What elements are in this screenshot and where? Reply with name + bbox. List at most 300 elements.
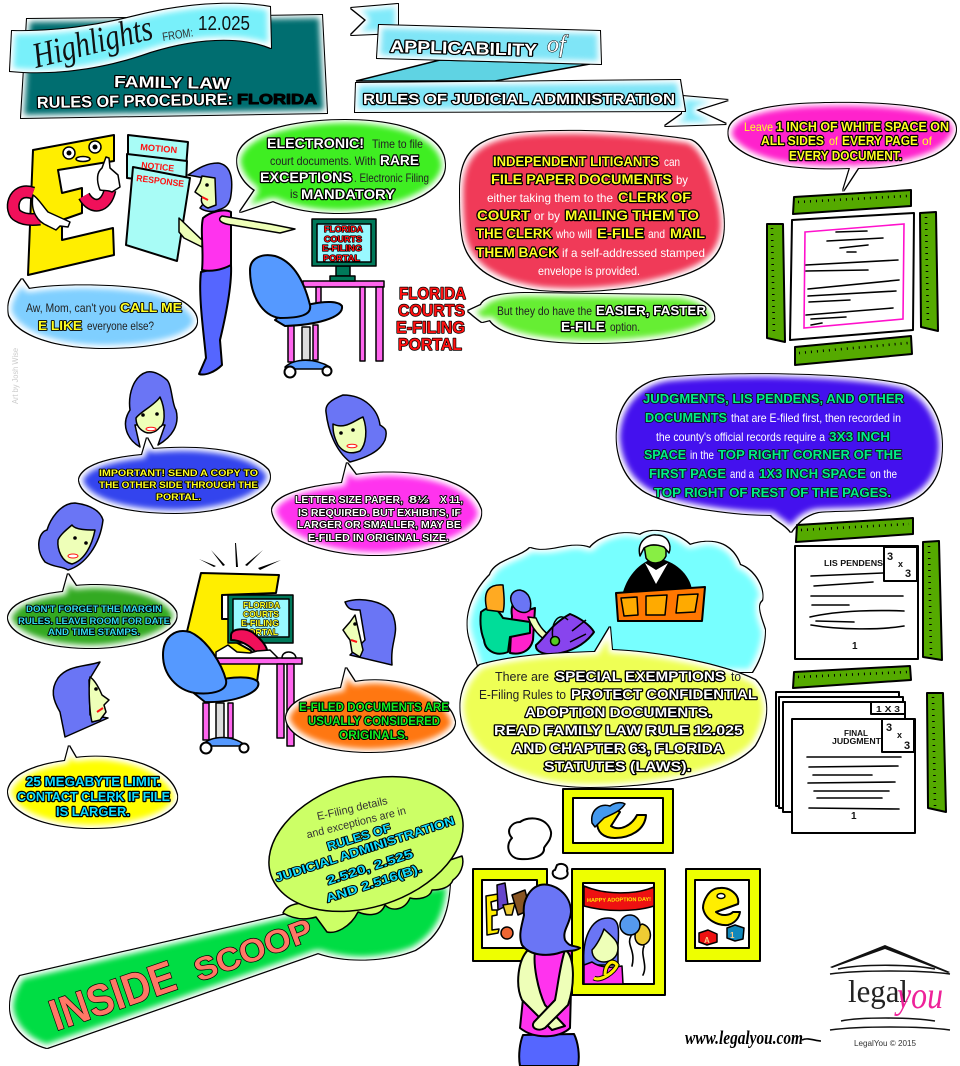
block 1: 1 (730, 931, 735, 940)
label: florida courts e-filing portal: COURTS (398, 302, 465, 320)
bubble text: LETTER SIZE PAPER, (295, 495, 403, 506)
monitor (312, 219, 376, 266)
right arm (84, 190, 110, 205)
bubble text: FILE PAPER DOCUMENTS (491, 172, 672, 187)
bubble text: CALL ME (120, 300, 182, 315)
back pages (776, 692, 905, 812)
bottom ruler (795, 336, 912, 365)
top (520, 948, 572, 1036)
screen (233, 599, 289, 637)
bubble text: everyone else? (87, 319, 154, 333)
bubble text (295, 495, 463, 544)
bubble text: either taking them to the (487, 191, 613, 205)
bubble text: or by (534, 209, 560, 223)
bubble text: THE OTHER SIDE THROUGH THE (99, 480, 258, 491)
art credit: Art by Josh Wise (11, 347, 20, 404)
bubble text: 25 MEGABYTE LIMIT. (26, 775, 161, 789)
first player (497, 883, 508, 910)
left ruler (767, 224, 785, 342)
lower curves (830, 1018, 950, 1030)
bubble text (17, 775, 170, 819)
face (333, 417, 366, 453)
bubble text: CONTACT CLERK IF FILE (17, 790, 170, 804)
speech bubble: electronic (237, 120, 445, 213)
hair (345, 600, 396, 665)
label: florida courts e-filing portal (396, 285, 466, 354)
bubble shape (468, 293, 714, 343)
3x3 label: x (898, 559, 903, 569)
scoop word: SCOOP (189, 911, 318, 989)
speech bubble: call me E (8, 279, 197, 348)
adoptive mother and child (480, 585, 552, 654)
bubble text: who will (555, 227, 592, 241)
speech bubble: originals (286, 668, 455, 752)
magenta margin (804, 224, 904, 328)
of script: of (547, 32, 569, 58)
family law heading: FAMILY LAW (114, 74, 231, 93)
bubble text: on the (870, 467, 897, 481)
ball text: RULES OF (325, 821, 392, 854)
framed picture: e with blocks (686, 869, 760, 961)
blue cap (592, 803, 625, 827)
framed picture: E playing basketball (473, 869, 547, 961)
character: head one (125, 372, 177, 447)
motion label: MOTION (140, 142, 178, 155)
bubble text: JUDGMENTS, LIS PENDENS, AND OTHER (643, 392, 904, 406)
yellow frame (572, 869, 665, 995)
motion page (128, 135, 188, 168)
bubble text: IS REQUIRED. BUT EXHIBITS, IF (298, 508, 461, 519)
bubble text: Aw, Mom, can't you (26, 301, 116, 315)
mother face (592, 929, 618, 962)
mother portrait hair (584, 918, 619, 965)
1x3 label: 1 X 3 (876, 704, 900, 714)
front page (792, 719, 915, 833)
screen text: COURTS (243, 609, 279, 619)
hair (39, 503, 103, 570)
yellow e (597, 810, 646, 838)
yellow frame (473, 869, 547, 961)
bubble text: EXCEPTIONS (260, 169, 352, 185)
text lines (806, 231, 899, 325)
speech bubble: easier faster e-file (468, 293, 714, 343)
bubble text: court documents. With (270, 154, 376, 168)
illustration: E typing at computer (163, 543, 302, 754)
final judgment title: JUDGMENT (832, 737, 881, 746)
response page (126, 167, 190, 261)
top ruler (793, 666, 911, 688)
bubble text: READ FAMILY LAW RULE 12.025 (494, 723, 744, 738)
bubble text: of (922, 134, 933, 148)
judge robe (623, 558, 692, 592)
yellow E body (185, 573, 279, 684)
banner: highlights from 12.025 (10, 4, 327, 118)
label: florida courts e-filing portal: FLORIDA (399, 285, 466, 303)
3x3 label (887, 551, 911, 580)
bubble text: DON'T FORGET THE MARGIN (26, 604, 162, 614)
ribbon fold (356, 60, 590, 81)
left arm (518, 950, 565, 1030)
character: head three (39, 503, 103, 570)
desk (217, 658, 302, 746)
picture mat (573, 798, 663, 843)
character: head two (326, 395, 386, 462)
face (343, 615, 363, 657)
picture mat (695, 880, 749, 948)
features (94, 687, 103, 712)
trousers (199, 265, 231, 375)
screen text: FLORIDA (324, 224, 363, 234)
top ruler (796, 518, 913, 542)
ball text (273, 795, 456, 905)
bubble shape (728, 103, 956, 191)
red arm (231, 629, 267, 655)
lips (202, 197, 208, 200)
E body (28, 135, 114, 275)
right ruler (927, 693, 946, 812)
illustration: computer desk with portal (250, 219, 384, 378)
second player (512, 890, 530, 915)
right hand pointing (98, 157, 120, 192)
page number: 1 (852, 641, 858, 652)
bubble text: USUALLY CONSIDERED (308, 716, 440, 728)
framed picture: happy adoption day (572, 869, 665, 995)
bubble text: 1X3 INCH SPACE (759, 467, 866, 481)
hair (53, 662, 108, 737)
bubble text: THEM BACK (476, 245, 558, 260)
bubble text: E-Filing Rules to (479, 688, 566, 702)
yellow frame (563, 789, 673, 853)
bubble text: by (676, 173, 688, 187)
bubble text (479, 669, 757, 774)
ball text: JUDICIAL ADMINISTRATION (273, 813, 456, 885)
bubble text: AND TIME STAMPS. (48, 627, 140, 637)
speech bubble: special exemptions (460, 627, 766, 787)
from label: FROM: (161, 25, 194, 44)
rules band (355, 80, 685, 112)
3x3 label: 3 (904, 740, 910, 752)
rule number: 12.025 (198, 13, 250, 35)
diagram: page with one inch margins (767, 190, 938, 365)
address text: www.legalyou.com (685, 1028, 803, 1049)
bubble text: MAILING THEM TO (565, 208, 699, 223)
bubble text: TOP RIGHT CORNER OF THE (718, 448, 902, 462)
screen text: COURTS (324, 234, 362, 244)
3x3 box (884, 547, 917, 581)
bubble text: MAIL (670, 226, 705, 241)
chair (250, 255, 342, 378)
hands and keyboard (216, 645, 278, 658)
right arm (533, 950, 573, 1030)
bubble text: DOCUMENTS (645, 411, 727, 425)
right ruler (923, 541, 942, 660)
bubble text: EASIER, FASTER (596, 303, 707, 318)
bubble text: the county's official records require a (656, 430, 825, 444)
illustration: mascot letter E (13, 135, 120, 275)
bubble text: of (829, 134, 839, 148)
bubble text: TOP RIGHT OF REST OF THE PAGES. (654, 486, 891, 500)
illustration: mom standing (179, 163, 295, 375)
thought cloud: courtroom adoption scene (468, 531, 765, 672)
screen text: PORTAL (243, 627, 278, 637)
bubble text: RULES. LEAVE ROOM FOR DATE (18, 616, 170, 626)
screen text (322, 224, 363, 263)
you script: you (894, 975, 943, 1017)
features (339, 428, 357, 448)
bubble text: IS LARGER. (56, 805, 130, 819)
bubble text: is (290, 187, 298, 201)
ball text: AND 2.516(B). (324, 861, 423, 905)
judge collar (645, 563, 668, 584)
letter E (486, 894, 499, 935)
screen text: FLORIDA (243, 600, 280, 610)
picture mat (583, 883, 654, 984)
features (141, 412, 159, 431)
monitor stand (330, 266, 355, 281)
bubble text (260, 135, 429, 202)
scoop handle and cup (10, 883, 450, 1048)
label: florida courts e-filing portal: PORTAL (398, 336, 462, 354)
lis pendens title: LIS PENDENS (824, 559, 884, 568)
bubble text: COURT (477, 208, 531, 223)
bubble shape (460, 627, 766, 787)
notice label: NOTICE (141, 160, 175, 173)
bubble text: to (731, 670, 741, 684)
bubble text: E-FILED IN ORIGINAL SIZE. (308, 533, 449, 544)
final judgment title (832, 729, 881, 746)
text lines (807, 757, 901, 809)
hair (125, 372, 177, 447)
left ribbon tail (351, 4, 398, 35)
final judgment title: FINAL (844, 729, 868, 738)
bubble text: and (648, 227, 665, 241)
bubble text (18, 604, 170, 637)
upper curves (830, 965, 950, 974)
bubble shape (272, 463, 481, 555)
cloud shape (468, 531, 765, 672)
burst lines (199, 543, 281, 570)
bubble text: EVERY PAGE (842, 134, 918, 148)
3x3 label: 3 (887, 551, 893, 563)
speech bubble: 25 megabyte limit (8, 746, 177, 828)
face (58, 525, 95, 564)
right ribbon tail (665, 96, 728, 126)
eyes (63, 141, 101, 159)
features (351, 622, 357, 642)
screen text (241, 600, 280, 637)
bubble text: MANDATORY (301, 186, 396, 202)
banner text: HAPPY ADOPTION DAY! (587, 897, 651, 904)
thought bubbles (508, 818, 568, 879)
small thought cloud (553, 864, 568, 879)
ice cream ball (251, 753, 481, 935)
balloons (620, 915, 650, 975)
bubble text: option. (610, 320, 640, 334)
mother top (584, 962, 623, 984)
applicability band (377, 25, 601, 64)
bubble text: There are (495, 670, 549, 684)
bubble text: SPECIAL EXEMPTIONS (555, 669, 725, 684)
trophy (503, 903, 515, 915)
bubble shape (79, 438, 270, 513)
pointing arm (220, 216, 295, 233)
framed picture: e with cap (563, 789, 673, 853)
ice cream frill (283, 856, 463, 932)
judge hair (639, 535, 670, 556)
block A: A (704, 936, 710, 945)
page (795, 546, 918, 659)
notice page (127, 154, 187, 185)
bubble text (99, 468, 258, 503)
bubble text (497, 303, 707, 334)
bubble text: and a (730, 467, 754, 481)
bubble text: E-FILE (597, 226, 644, 241)
3x3 box (882, 719, 914, 752)
bubble text: . Electronic Filing (354, 171, 429, 185)
bubble text (299, 702, 449, 742)
character: head four profile (53, 662, 109, 737)
bubble text (744, 120, 949, 163)
e eye (717, 894, 725, 898)
judge bench (616, 587, 705, 621)
bubble shape (460, 131, 724, 291)
hair (326, 395, 386, 462)
bubble text (476, 154, 705, 278)
bubble text: PROTECT CONFIDENTIAL (571, 687, 757, 702)
bubble text: ADOPTION DOCUMENTS. (525, 705, 712, 720)
roof (830, 945, 950, 973)
bubble text: 8½ (409, 495, 429, 506)
page number: 1 (851, 811, 857, 822)
bubble text: CLERK OF (618, 190, 691, 205)
judge face (644, 545, 666, 563)
bubble text: E-FILED DOCUMENTS ARE (299, 702, 449, 714)
face (136, 397, 164, 433)
desk (303, 281, 384, 361)
diagram: lis pendens page (795, 518, 942, 660)
red banner (584, 886, 654, 910)
top (202, 210, 231, 271)
speech bubble: margin rules (8, 574, 177, 648)
bubble text: THE CLERK (476, 226, 552, 241)
speech bubble: letter size paper (272, 463, 481, 555)
features (68, 536, 88, 558)
screen text: E-FILING (241, 618, 279, 628)
screen text: PORTAL (323, 253, 360, 263)
mouse (282, 652, 296, 658)
logo: legalyou (830, 945, 950, 1048)
bubble text: Leave (744, 120, 773, 134)
speech bubble: leave 1 inch (728, 103, 956, 191)
bubble text: ALL SIDES (761, 134, 824, 148)
character: head five profile (343, 600, 396, 665)
bubble text: 3X3 INCH (829, 430, 890, 444)
left arm (13, 192, 40, 220)
basketball (501, 927, 513, 939)
mouth (76, 156, 90, 162)
documents: motion notice response (126, 135, 190, 261)
bubble text: IMPORTANT! SEND A COPY TO (99, 468, 258, 479)
bubble text: FIRST PAGE (649, 467, 726, 481)
bubble shape (286, 668, 455, 752)
bubble shape (617, 374, 942, 532)
bubble text: PORTAL. (156, 492, 201, 503)
bubble text: can (664, 155, 680, 169)
paper (790, 213, 914, 340)
ball text: and exceptions are in (305, 805, 407, 841)
3x3 label: 3 (905, 568, 911, 580)
bubble text: LARGER OR SMALLER, MAY BE (297, 520, 461, 531)
face (89, 677, 109, 722)
illustration: inside scoop (10, 753, 481, 1048)
bubble text: SPACE (644, 448, 686, 462)
bubble shape (237, 120, 445, 213)
bubble text: E LIKE (38, 318, 82, 333)
baby e (594, 962, 617, 979)
inside word: INSIDE (43, 952, 182, 1040)
diagram: final judgment stacked pages (776, 666, 946, 833)
text lines (810, 573, 904, 629)
bubble text: if a self-addressed stamped (562, 246, 705, 260)
highlights script: Highlights (27, 7, 156, 76)
bench panels (621, 594, 698, 616)
face (195, 176, 216, 208)
rules text: RULES OF JUDICIAL ADMINISTRATION (363, 91, 675, 108)
screen (317, 224, 371, 262)
hair (188, 163, 232, 211)
florida heading: FLORIDA (237, 91, 317, 108)
screen text: E-FILING (322, 243, 362, 253)
copyright: LegalYou © 2015 (854, 1039, 917, 1048)
chair (163, 631, 258, 754)
paper arm (179, 218, 202, 247)
skirt (519, 1034, 579, 1066)
eye (205, 183, 209, 187)
bubble text: STATUTES (LAWS). (544, 759, 691, 774)
bubble text: that are E-filed first, then recorded in (731, 411, 901, 425)
character: mom viewed from behind (518, 885, 580, 1066)
bubble text: 1 INCH OF WHITE SPACE ON (776, 120, 949, 134)
top ruler (793, 190, 911, 214)
label: florida courts e-filing portal: E-FILING (396, 319, 465, 337)
bubble text: Time to file (372, 137, 423, 151)
bubble text: E-FILE (561, 319, 605, 334)
ball text: 2.520, 2.525 (325, 846, 415, 888)
bubble text: INDEPENDENT LITIGANTS (493, 154, 659, 169)
baby carrier (536, 614, 594, 654)
hair (520, 885, 580, 955)
speech bubble: judgments and lis pendens (617, 374, 942, 532)
yellow frame (686, 869, 760, 961)
cyan ribbon (10, 4, 271, 72)
speech bubble: send a copy (79, 438, 270, 513)
3x3 label: x (897, 730, 902, 740)
picture mat (482, 880, 537, 948)
bubble shape (8, 279, 197, 348)
pen tail (802, 1039, 821, 1041)
left hand (32, 195, 70, 230)
3x3 label (886, 722, 910, 752)
bubble text: X 11, (440, 495, 463, 506)
large thought cloud (508, 818, 551, 859)
bubble text: RARE (380, 152, 419, 168)
bubble shape (8, 574, 177, 648)
monitor (228, 595, 293, 643)
teal title panel (21, 15, 327, 118)
bubble text (26, 300, 182, 333)
bubble text: But they do have the (497, 304, 592, 318)
1x3 box (871, 702, 905, 714)
